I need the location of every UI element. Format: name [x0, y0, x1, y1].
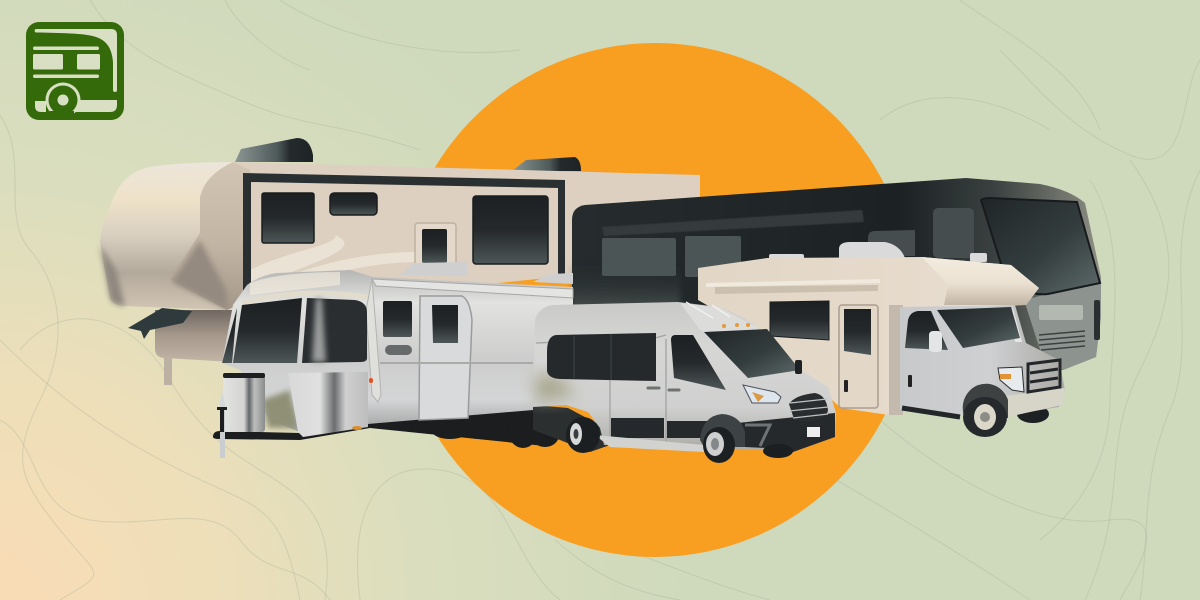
cab over bunk — [922, 257, 1039, 305]
front windows — [222, 298, 302, 363]
wraparound window with reflection — [302, 298, 367, 363]
door — [839, 305, 878, 408]
cab side window — [905, 311, 948, 350]
mirror — [929, 331, 942, 352]
class C motorhome — [698, 242, 1065, 437]
lower dark trim — [611, 418, 715, 438]
roof vents — [235, 138, 581, 171]
aluminium shell — [222, 270, 573, 432]
door window — [671, 335, 726, 390]
windshield — [937, 307, 1020, 348]
fifth wheel trailer — [100, 138, 700, 385]
body swooshes — [250, 235, 430, 305]
side windows and awning — [602, 208, 974, 277]
grille — [1028, 360, 1060, 392]
cab — [900, 305, 1065, 417]
front wheel — [700, 414, 745, 463]
camper van — [533, 302, 836, 463]
front cap — [100, 162, 240, 310]
grille — [789, 393, 828, 421]
panel lines — [536, 335, 666, 445]
front lower panel — [1024, 280, 1101, 370]
front hatch panel — [288, 372, 368, 437]
door — [415, 223, 456, 273]
rear wheel — [566, 417, 600, 453]
body window — [770, 301, 829, 340]
cream body — [698, 257, 1039, 415]
side windows — [383, 301, 412, 355]
marker lights — [722, 323, 750, 328]
bumper — [996, 388, 1065, 418]
rear dark lower trim — [533, 405, 610, 452]
lower front shadow — [262, 390, 298, 428]
grille — [1039, 331, 1085, 350]
headlight — [998, 367, 1024, 392]
windshield — [704, 329, 800, 378]
windows — [262, 193, 548, 264]
roof air conditioners — [769, 242, 987, 262]
small far front wheel — [1017, 405, 1049, 423]
class A motorhome bus — [572, 178, 1101, 370]
front bumper — [737, 413, 835, 452]
door handles — [648, 388, 679, 390]
lower storage and landing leg — [128, 308, 232, 385]
Airstream travel trailer — [213, 262, 573, 458]
headlight — [743, 385, 781, 403]
under-frame and tires — [213, 408, 559, 448]
dark frame — [243, 173, 565, 290]
propane tank cover — [223, 373, 265, 432]
windshield — [981, 198, 1100, 294]
van body — [533, 302, 836, 452]
side windows — [547, 333, 656, 381]
tan trailer body — [233, 162, 700, 310]
orange circle — [398, 43, 912, 557]
front wheel — [963, 384, 1008, 437]
entry door — [419, 296, 472, 420]
far front tire — [763, 444, 793, 458]
tongue jack — [217, 390, 227, 458]
icon: green camper trailer badge — [26, 22, 124, 120]
roof air conditioners — [400, 262, 573, 284]
